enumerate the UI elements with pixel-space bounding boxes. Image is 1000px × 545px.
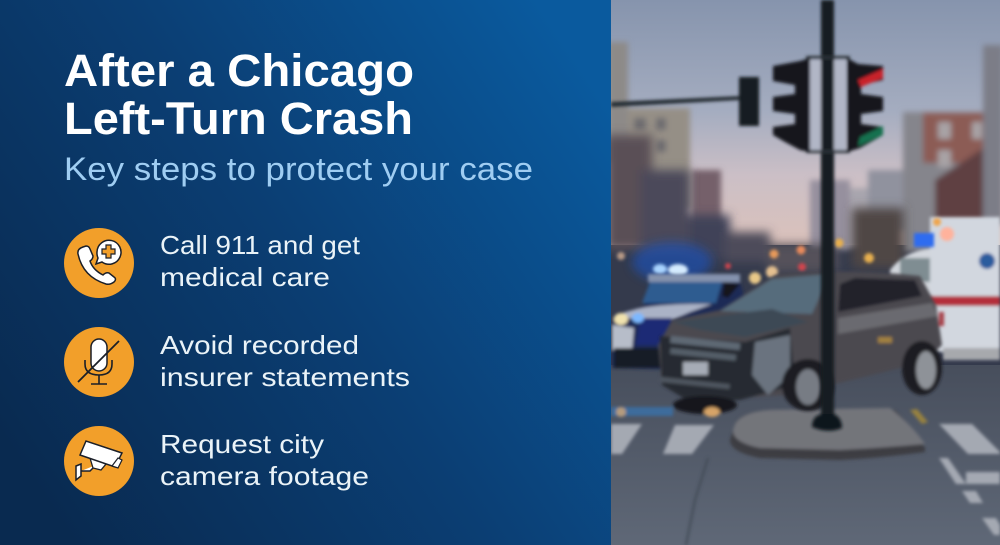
crashed grey SUV [611, 272, 944, 417]
title: After a Chicago [64, 45, 414, 96]
text: step 3: Request city [160, 429, 324, 459]
ambulance [890, 217, 1000, 360]
red and green lamps [858, 69, 883, 87]
crosswalk and lane markings [611, 424, 1000, 535]
text: step 2: insurer statements [160, 362, 410, 392]
step 2: avoid recorded statements [64, 327, 410, 397]
street bokeh lights [617, 238, 874, 284]
title: Left-Turn Crash [64, 93, 413, 144]
road [611, 365, 1000, 545]
subtitle: Key steps to protect your case [64, 151, 533, 187]
traffic signals and pole [611, 0, 883, 431]
signal brackets [806, 56, 850, 59]
icon: muted microphone [64, 327, 134, 397]
emergency lights [653, 218, 954, 276]
sky [611, 0, 1000, 250]
text: step 1 [160, 230, 361, 292]
mast arm and small signal [611, 96, 740, 107]
icon: phone with medical cross [64, 228, 134, 298]
step 3: request camera footage [64, 426, 369, 496]
text: step 1: Call 911 and get [160, 230, 361, 260]
text: step 3: camera footage [160, 461, 369, 491]
title [64, 45, 414, 144]
text: step 2 [160, 330, 410, 392]
signal pole [821, 0, 834, 420]
road crack [686, 458, 708, 545]
police car [612, 274, 745, 370]
panel: navy text background [0, 0, 611, 545]
icon: security camera [64, 426, 134, 496]
text: step 2: Avoid recorded [160, 330, 359, 360]
blue emergency glow [632, 242, 712, 282]
text: step 3 [160, 429, 369, 491]
sky halo between signal heads [810, 60, 821, 150]
left signal head [773, 58, 810, 152]
text: step 1: medical care [160, 262, 330, 292]
photo: blurred crash scene at a Chicago intersection [606, 0, 1000, 545]
traffic island [730, 408, 928, 460]
background buildings [608, 42, 1000, 252]
step 1: call 911 [64, 228, 361, 298]
right signal head [847, 58, 883, 152]
bare trees and distant street [606, 135, 904, 272]
